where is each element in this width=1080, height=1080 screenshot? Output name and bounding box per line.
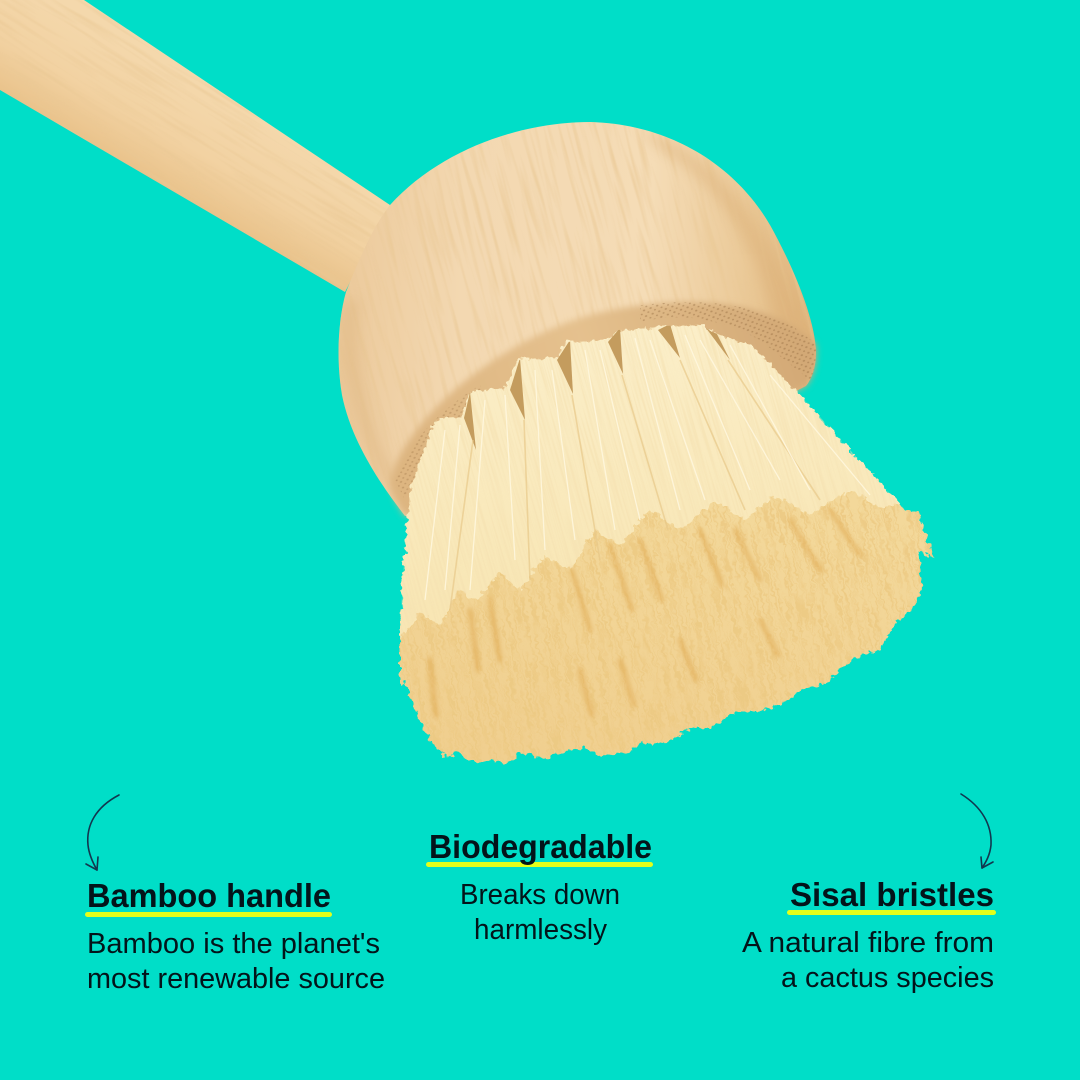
pale upper bristle mass [399,324,900,638]
bamboo head [338,122,822,521]
bristle detail: shading, tuft gaps and strands [400,324,896,718]
orange shadow streaks in the trimmed ends [430,510,860,715]
callout: bamboo handle [85,795,385,995]
body: bamboo handle: most renewable source [87,963,385,995]
body: biodegradable: harmlessly [474,914,607,946]
brush photo: bamboo handle and sisal bristles [0,0,992,864]
body: bamboo handle: Bamboo is the planet's [87,928,380,960]
body: sisal bristles: a cactus species [781,962,994,994]
tuft edge shadows [450,360,820,610]
heading: bamboo handle: Bamboo handle [87,877,331,914]
darker gaps between tuft roots [464,324,730,450]
arrow: left curved [86,795,119,870]
callout: sisal bristles [742,794,996,994]
highlight underline: sisal bristles [787,910,996,915]
callout: biodegradable [426,828,653,946]
heading: biodegradable: Biodegradable [429,828,652,865]
highlight underline: biodegradable [426,862,653,867]
strand texture in pale mass [400,324,896,640]
bamboo handle [0,0,390,292]
sisal bristles silhouette [398,324,934,764]
highlight underline: bamboo handle [85,912,332,917]
body: biodegradable: Breaks down [460,879,620,911]
arrow: right curved [961,794,993,868]
underside lip of the head [390,294,816,516]
heading: sisal bristles: Sisal bristles [790,876,994,913]
lighter strand highlights [425,335,870,600]
body: sisal bristles: A natural fibre from [742,927,994,959]
